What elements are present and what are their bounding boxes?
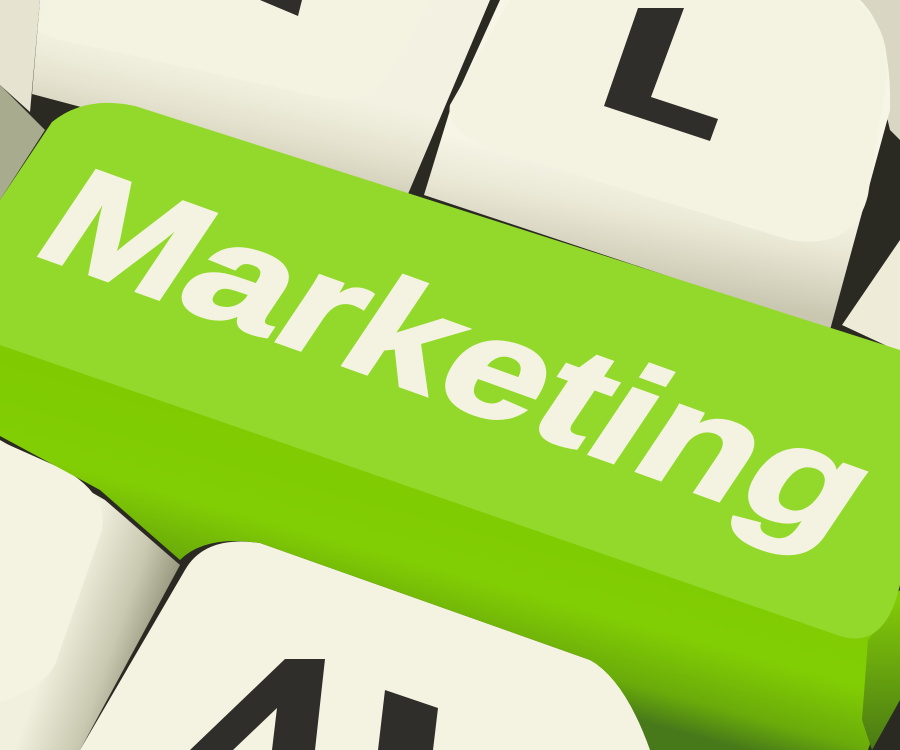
key: L bbox=[424, 0, 890, 330]
key top face bbox=[0, 103, 900, 638]
key: top partial letter bbox=[32, 0, 490, 194]
key: bottom left bbox=[0, 440, 180, 750]
label: Marketing: Marketing bbox=[10, 141, 900, 569]
letter fragment bbox=[190, 659, 438, 750]
key top right corner bbox=[860, 0, 900, 140]
key: bottom with letter N bbox=[80, 542, 655, 750]
letter L bbox=[604, 8, 718, 141]
key front face bbox=[0, 340, 900, 750]
key far right bbox=[842, 240, 900, 352]
key side right bbox=[862, 600, 900, 750]
letter fragment bbox=[260, 0, 302, 16]
far left key bbox=[0, 0, 45, 200]
